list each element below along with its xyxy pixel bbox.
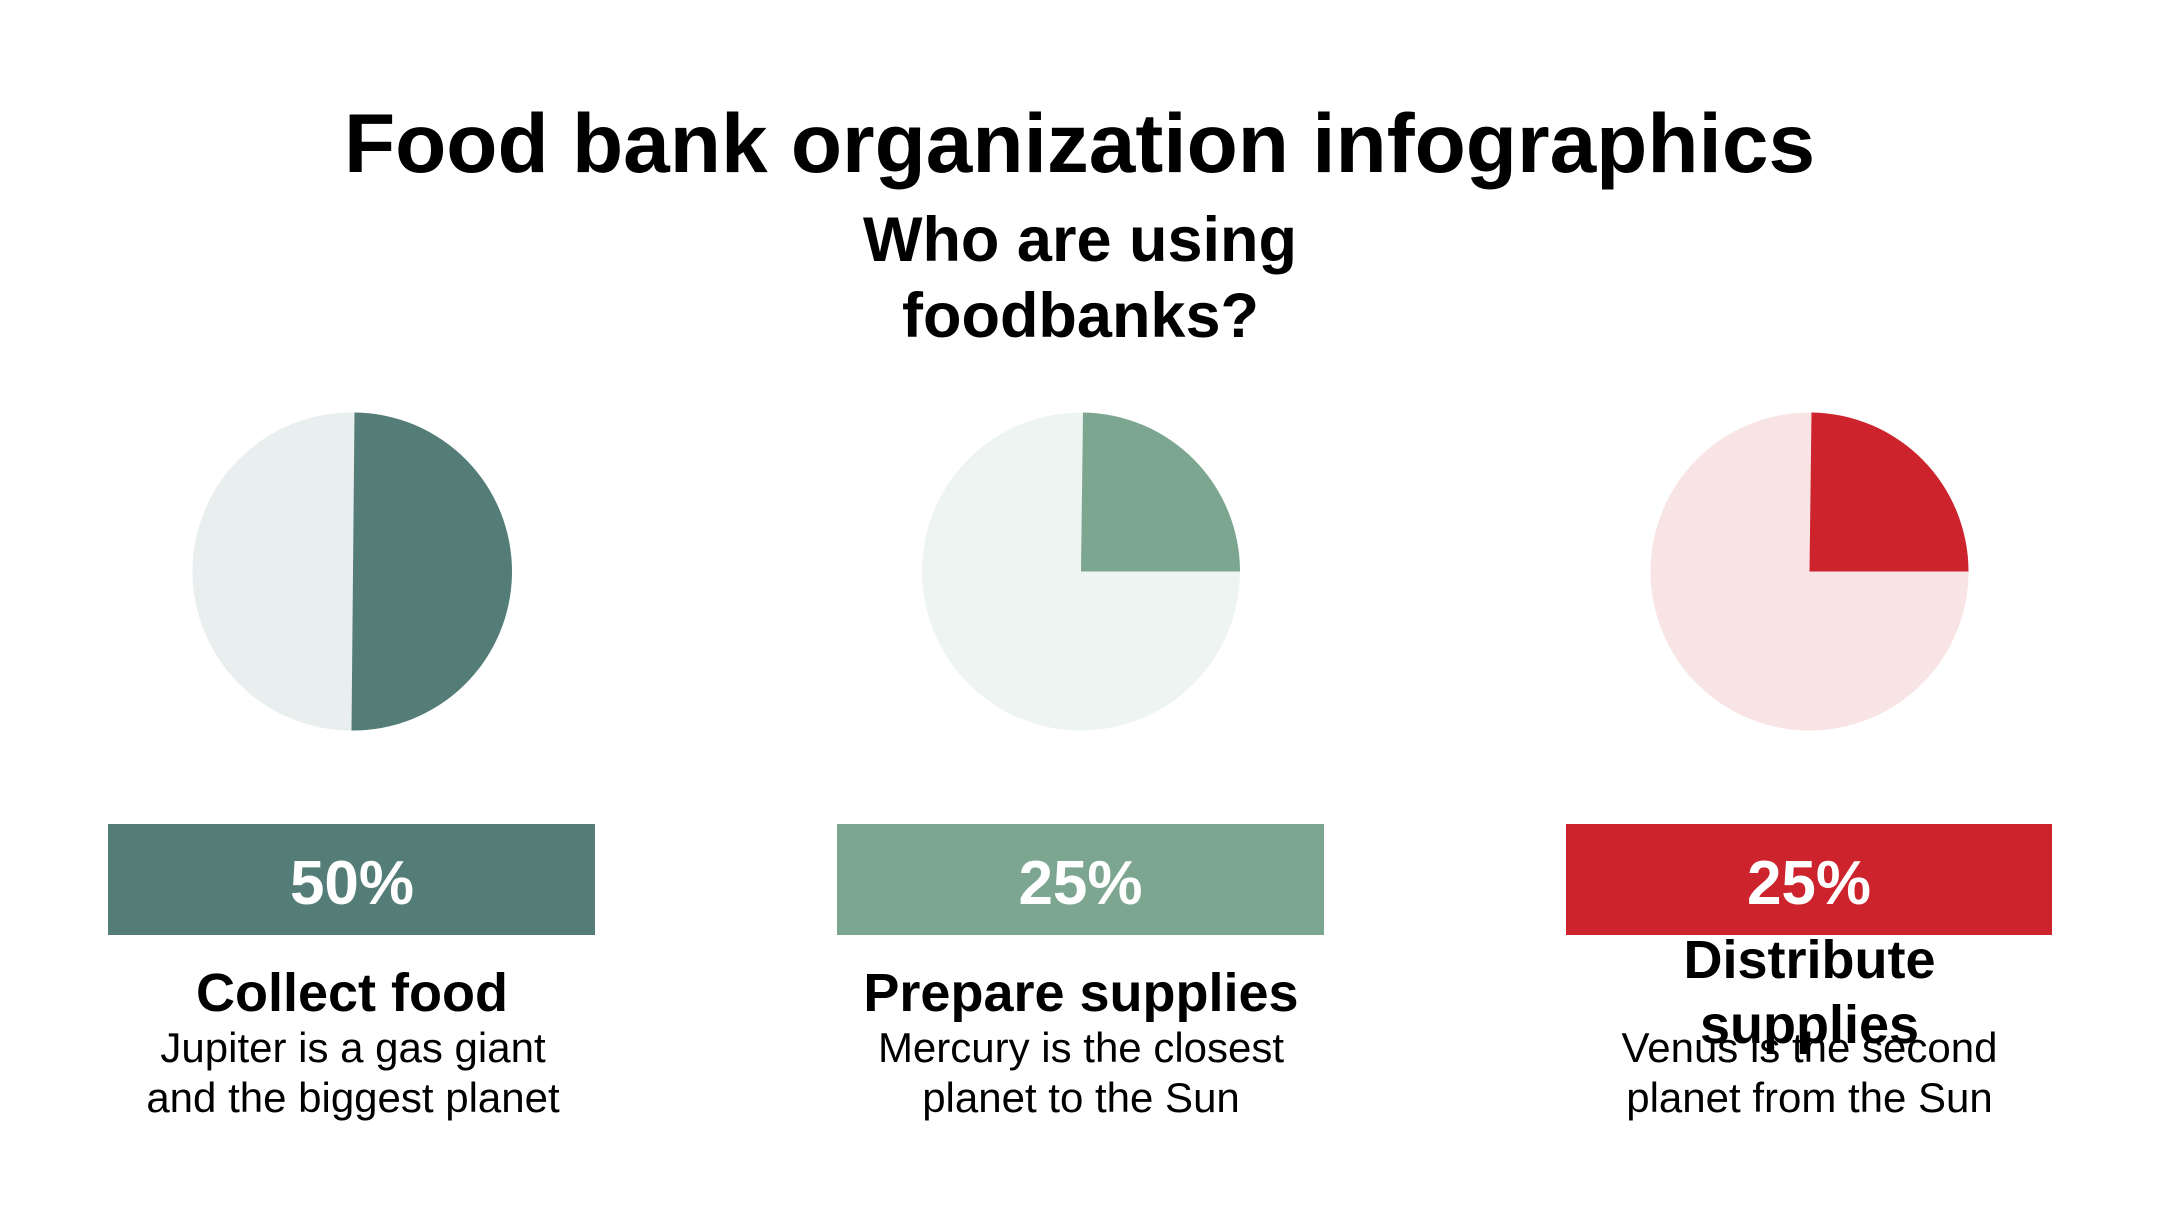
- heading: distribute supplies: supplies: [1700, 995, 1919, 1055]
- description: collect food: and the biggest planet: [146, 1074, 560, 1121]
- pie chart: 25%: [922, 412, 1240, 730]
- percentage bar: 50%: [108, 824, 595, 935]
- heading: collect food: Collect food: [196, 963, 508, 1023]
- panel: distribute supplies: [1566, 412, 2052, 1121]
- heading: distribute supplies: Distribute: [1683, 930, 1936, 990]
- pie chart: 50%: [192, 412, 512, 731]
- heading: prepare supplies: Prepare supplies: [863, 963, 1299, 1023]
- percentage bar: 25%: 25%: [1018, 849, 1143, 918]
- title: Food bank organization infographics: [344, 96, 1815, 190]
- description: distribute supplies: Venus is the second: [1622, 1024, 1997, 1071]
- description: distribute supplies: planet from the Sun: [1626, 1074, 1993, 1121]
- percentage bar: 25%: [1566, 824, 2052, 935]
- description: collect food: Jupiter is a gas giant: [160, 1024, 546, 1071]
- subtitle: foodbanks?: [902, 281, 1259, 351]
- subtitle: Who are using: [863, 205, 1297, 275]
- description: prepare supplies: planet to the Sun: [922, 1074, 1240, 1121]
- panel: prepare supplies: [837, 412, 1324, 1121]
- panel: collect food: [108, 412, 595, 1121]
- percentage bar: 25%: 25%: [1747, 849, 1871, 918]
- description: prepare supplies: Mercury is the closest: [878, 1024, 1284, 1071]
- percentage bar: 25%: [837, 824, 1324, 935]
- percentage bar: 50%: 50%: [290, 849, 414, 918]
- pie chart: 25%: [1650, 412, 1968, 730]
